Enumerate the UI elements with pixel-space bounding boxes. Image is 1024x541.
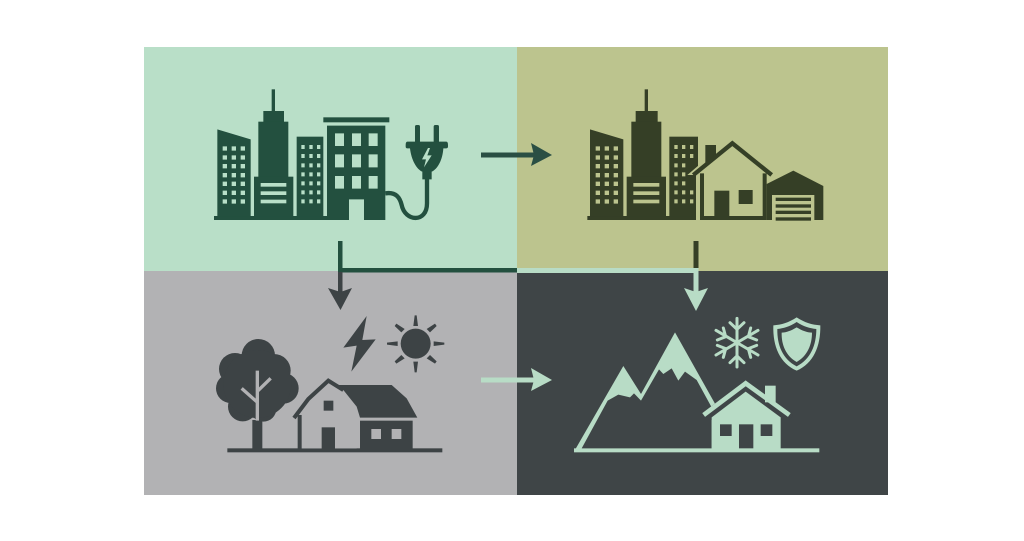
arrow: bottom horizontal — [481, 368, 552, 391]
icon: mountain house — [700, 380, 793, 449]
icon: mountains, house, snowflake and shield — [574, 317, 820, 452]
icon: shield — [773, 317, 820, 371]
icon: tree — [216, 339, 299, 450]
panel: dark mountain — [517, 271, 888, 495]
icon: plug cable — [385, 178, 427, 218]
icon: barn — [294, 381, 417, 449]
arrow: top horizontal — [481, 143, 552, 166]
icon: mountains — [574, 332, 717, 452]
icon: city with plug — [214, 89, 448, 220]
icon: lightning bolt — [343, 316, 376, 372]
arrow: left down with connector — [328, 241, 517, 310]
arrow: right down with connector — [517, 241, 708, 311]
panel: gray rural — [144, 271, 517, 495]
icon: garage — [767, 171, 823, 221]
icon: tree, barn, bolt and sun — [216, 315, 444, 452]
icon: city with house and garage — [587, 89, 823, 221]
icon: house — [687, 137, 777, 220]
panel: olive city and house — [517, 47, 888, 271]
icon: snowflake — [716, 318, 758, 367]
panel: mint city — [144, 47, 517, 271]
icon: sun — [387, 315, 444, 372]
icon: plug — [406, 125, 448, 179]
